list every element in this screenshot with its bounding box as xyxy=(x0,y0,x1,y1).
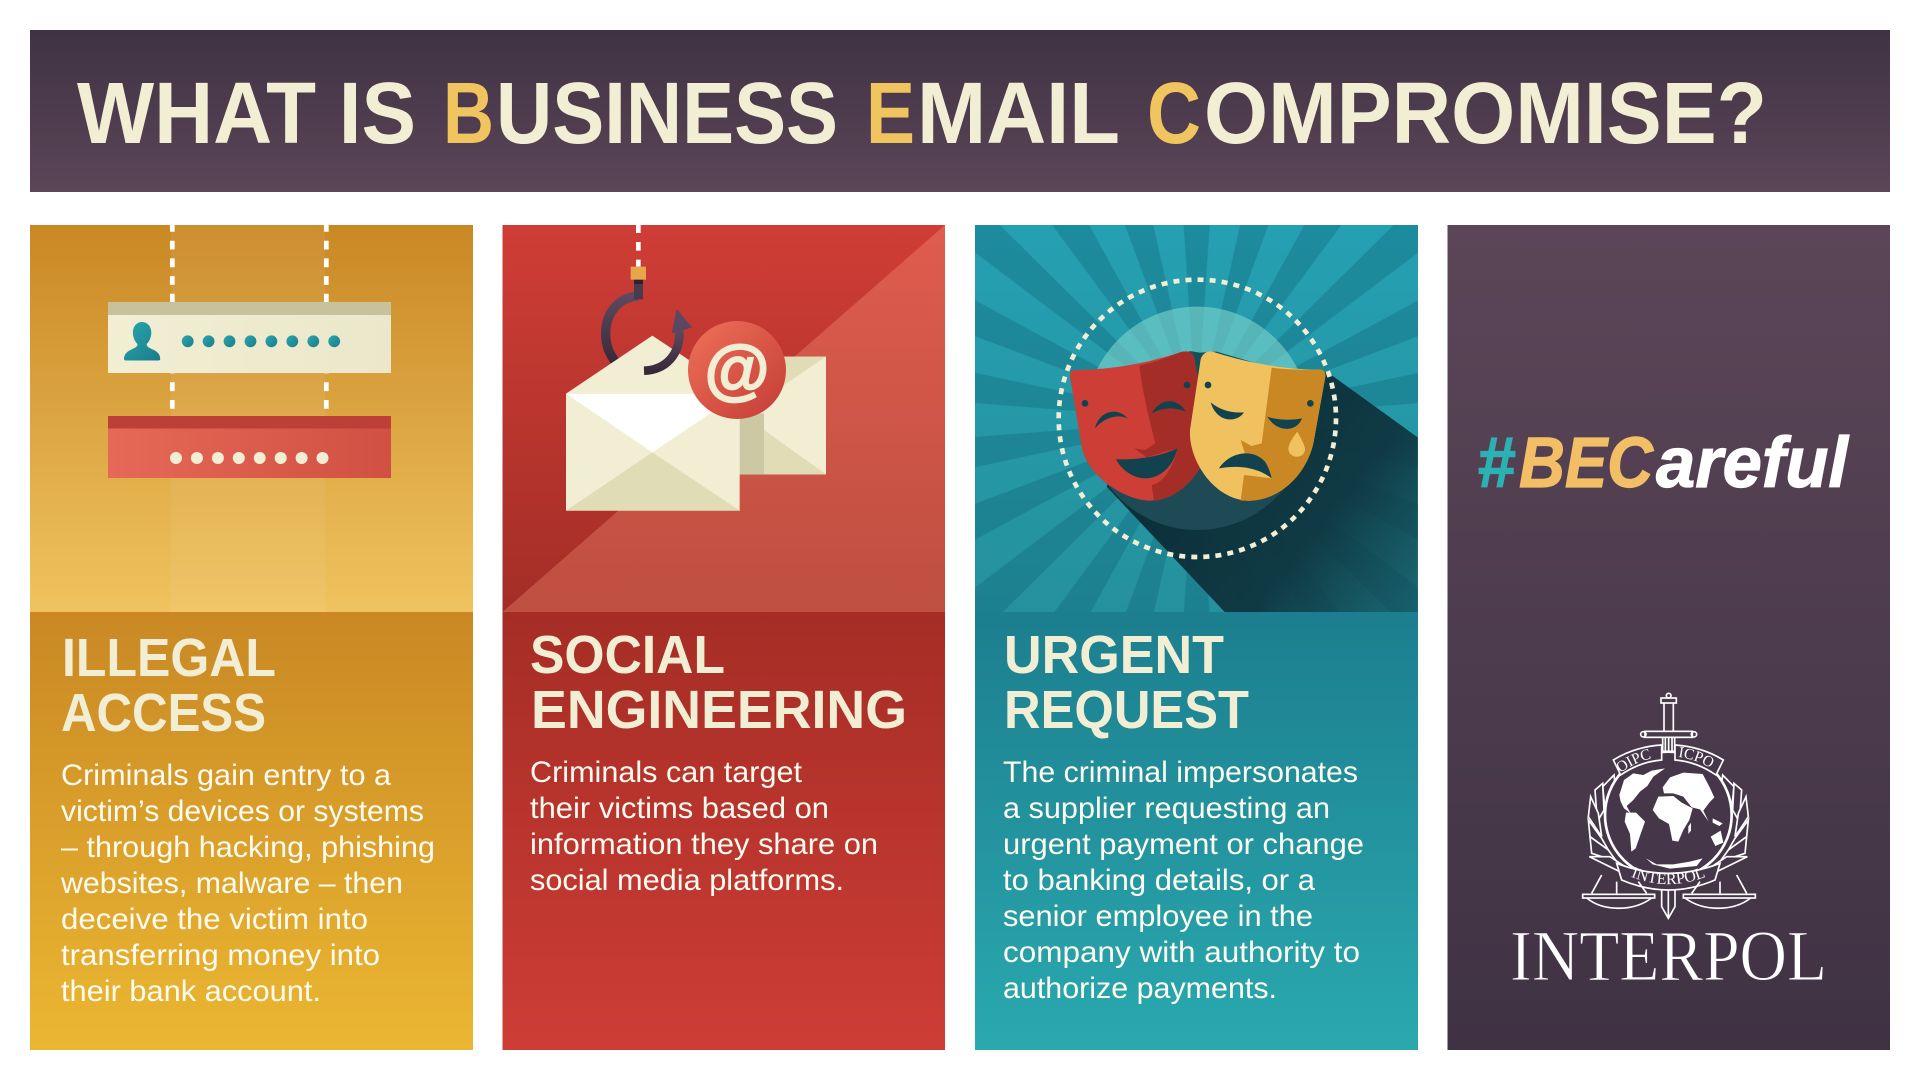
dotted ring xyxy=(1059,280,1336,557)
halo circle xyxy=(1097,306,1298,530)
icon: user xyxy=(124,322,160,360)
title: MAIL xyxy=(917,65,1120,162)
body text: social engineering xyxy=(530,756,878,897)
panel: illegal access xyxy=(30,225,473,1050)
long shadow xyxy=(1107,372,1418,612)
body text: urgent request xyxy=(1003,756,1364,1005)
title: B xyxy=(443,65,494,162)
panel: urgent request xyxy=(897,120,1496,1050)
panel: social engineering xyxy=(502,225,945,1050)
title: OMPROMISE? xyxy=(1204,65,1767,162)
title: C xyxy=(1147,65,1201,162)
body text: illegal access xyxy=(60,759,435,1008)
gap shadow between masks xyxy=(1189,351,1255,377)
heading: illegal access: ILLEGAL xyxy=(62,628,276,688)
fishing line xyxy=(631,225,645,267)
heading: urgent request xyxy=(1004,625,1249,740)
happy mask xyxy=(1070,351,1202,501)
sunburst rays xyxy=(975,225,1418,612)
top banner: OIPC xyxy=(1616,749,1651,772)
hanging dashed lines xyxy=(172,225,326,416)
hashtag: BEC xyxy=(1519,424,1655,503)
back envelope xyxy=(703,357,826,474)
hashtag: areful xyxy=(1656,424,1849,503)
globe xyxy=(1605,752,1732,878)
front envelope xyxy=(566,336,740,511)
body text: urgent request: to banking details, or a xyxy=(1003,864,1315,897)
password dots: teal xyxy=(182,335,340,347)
hook xyxy=(606,267,646,363)
bottom banner xyxy=(1615,862,1722,891)
body text: illegal access: Criminals gain entry to a xyxy=(61,759,391,792)
illustration: phishing hook and envelopes xyxy=(566,225,826,511)
top banner: ICPO xyxy=(1678,746,1714,766)
sad mask xyxy=(1190,352,1325,501)
body text: illegal access: their bank account. xyxy=(61,975,321,1008)
scales xyxy=(1583,875,1755,908)
body text: social engineering: their victims based on xyxy=(530,792,829,825)
hashtag: # xyxy=(1477,424,1515,503)
body text: illegal access: victim’s devices or systems xyxy=(61,795,424,828)
body text: illegal access: websites, malware – then xyxy=(60,867,403,900)
body text: urgent request: The criminal impersonates xyxy=(1003,756,1358,789)
heading: illegal access: ACCESS xyxy=(61,683,266,743)
body text: illegal access: – through hacking, phishing xyxy=(61,831,435,864)
icon: at sign badge xyxy=(688,321,786,419)
arrow xyxy=(644,309,692,371)
header banner xyxy=(30,30,1890,192)
title: E xyxy=(866,65,915,162)
body text: urgent request: authorize payments. xyxy=(1003,972,1277,1005)
login username bar xyxy=(108,302,391,373)
laurel wreath xyxy=(1588,775,1748,875)
body text: illegal access: transferring money into xyxy=(61,939,380,972)
body text: social engineering: Criminals can target xyxy=(530,756,803,789)
sword xyxy=(1641,693,1697,918)
illustration: sunburst and theatre masks xyxy=(975,225,1418,612)
heading: social engineering: SOCIAL xyxy=(530,625,725,685)
heading: social engineering: ENGINEERING xyxy=(531,680,907,740)
body text: urgent request: urgent payment or change xyxy=(1003,828,1364,861)
login password bar xyxy=(108,416,391,478)
wordmark: INTERPOL xyxy=(1510,916,1827,996)
bottom banner: INTERPOL xyxy=(1631,867,1705,884)
icon: at sign badge: @ xyxy=(704,333,769,407)
title: WHAT IS xyxy=(77,65,416,162)
heading: social engineering xyxy=(530,625,907,740)
body text: social engineering: information they share on xyxy=(530,828,878,861)
title: USINESS xyxy=(496,65,838,162)
body text: urgent request: company with authority to xyxy=(1003,936,1360,969)
panel: hashtag and logo xyxy=(1408,225,1890,1050)
heading: illegal access xyxy=(61,628,276,743)
body text: urgent request: senior employee in the xyxy=(1003,900,1313,933)
body text: urgent request: a supplier requesting an xyxy=(1003,792,1330,825)
heading: urgent request: URGENT xyxy=(1004,625,1224,685)
body text: social engineering: social media platforms. xyxy=(530,864,844,897)
top banner xyxy=(1612,744,1724,776)
INTERPOL emblem xyxy=(1582,692,1756,920)
body text: illegal access: deceive the victim into xyxy=(61,903,368,936)
heading: urgent request: REQUEST xyxy=(1004,680,1249,740)
